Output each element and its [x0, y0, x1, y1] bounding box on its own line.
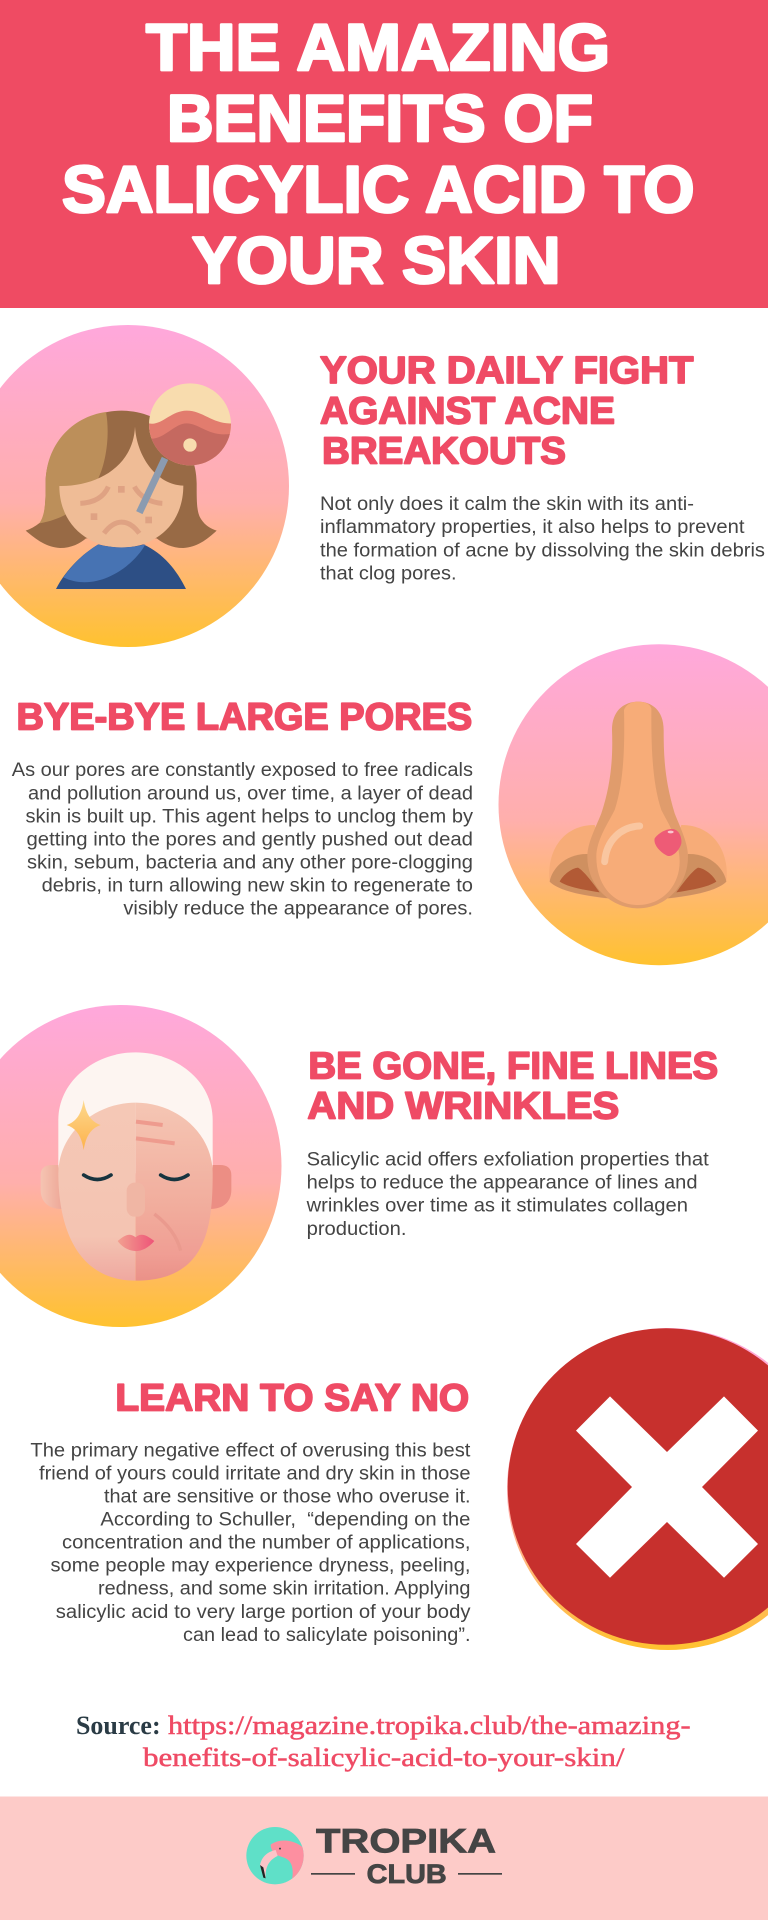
panel: acne breakouts — [0, 325, 765, 647]
text block: acne: inflammatory properties, it also helps to prevent — [320, 517, 745, 538]
text block: side effects — [30, 1440, 471, 1646]
heading: your daily fight: AGAINST ACNE — [320, 390, 615, 432]
text block: wrinkles: production. — [307, 1219, 406, 1240]
panel: large pores — [12, 644, 768, 965]
text block: pores: debris, in turn allowing new skin to regenerate to — [42, 876, 473, 896]
logo wordmark — [311, 1822, 502, 1889]
panel: learn to say no — [30, 1328, 768, 1650]
text block: wrinkles: helps to reduce the appearance of lines and — [307, 1173, 698, 1194]
text block: side effects: salicylic acid to very large portion of your body — [56, 1602, 471, 1623]
icon: nose with pimple — [498, 644, 768, 965]
text block: wrinkles: wrinkles over time as it stimulates collagen — [306, 1196, 688, 1217]
icon: half-aged face — [0, 1005, 282, 1327]
title: YOUR SKIN — [192, 223, 560, 297]
text block: wrinkles — [306, 1150, 709, 1240]
heading: your daily fight: YOUR DAILY FIGHT — [320, 350, 694, 392]
source citation: Source: — [76, 1711, 161, 1740]
source citation: benefits-of-salicylic-acid-to-your-skin/ — [143, 1743, 625, 1772]
header banner — [0, 0, 768, 308]
heading: be gone — [307, 1046, 718, 1128]
text block: pores: skin, sebum, bacteria and any other pore-clogging — [27, 852, 473, 874]
heading: learn to say no: LEARN TO SAY NO — [115, 1378, 469, 1420]
text block: side effects: can lead to salicylate poisoning”. — [183, 1625, 470, 1646]
text block: pores — [12, 760, 474, 920]
text block: acne: Not only does it calm the skin with its anti- — [320, 494, 694, 515]
footer band — [0, 1796, 768, 1920]
text block: pores: and pollution around us, over time, a layer of dead — [28, 783, 473, 804]
logo wordmark: CLUB — [367, 1859, 447, 1889]
text block: pores: getting into the pores and gently pushed out dead — [26, 829, 473, 850]
heading: your daily fight: BREAKOUTS — [322, 430, 566, 472]
heading: bye-bye large pores: BYE-BYE LARGE PORES — [16, 696, 472, 738]
text block: wrinkles: Salicylic acid offers exfoliation properties that — [307, 1150, 709, 1171]
text block: side effects: The primary negative effect of overusing this best — [30, 1440, 471, 1461]
text block: pores: visibly reduce the appearance of pores. — [123, 899, 473, 920]
panel: fine lines and wrinkles — [0, 1005, 718, 1327]
text block: side effects: friend of yours could irritate and dry skin in those — [39, 1463, 470, 1484]
text block: acne: that clog pores. — [320, 564, 456, 584]
heading: be gone: BE GONE, FINE LINES — [308, 1046, 718, 1088]
text block: side effects: According to Schuller, “depending on the — [100, 1510, 470, 1530]
text block: pores: As our pores are constantly exposed to free radicals — [12, 760, 473, 781]
text block: side effects: that are sensitive or those who overuse it. — [104, 1486, 470, 1508]
text block: acne — [320, 494, 765, 584]
icon: red cross circle — [507, 1328, 768, 1650]
icon: flamingo logo — [246, 1827, 305, 1884]
title: SALICYLIC ACID TO — [62, 152, 694, 226]
logo wordmark: TROPIKA — [316, 1822, 496, 1860]
text block: side effects: redness, and some skin irritation. Applying — [98, 1579, 470, 1600]
heading: your daily fight — [320, 350, 694, 472]
title: THE AMAZING — [146, 10, 610, 84]
text block: pores: skin is built up. This agent helps to unclog them by — [26, 806, 474, 827]
text block: acne: the formation of acne by dissolving the skin debris — [320, 540, 765, 561]
face — [59, 427, 183, 547]
source citation — [76, 1711, 691, 1772]
source citation: https://magazine.tropika.club/the-amazing- — [168, 1711, 691, 1740]
heading: be gone: AND WRINKLES — [307, 1086, 619, 1128]
text block: side effects: concentration and the number of applications, — [62, 1533, 470, 1554]
title — [62, 10, 694, 297]
icon: girl with magnifier over acne — [0, 325, 289, 647]
text block: side effects: some people may experience dryness, peeling, — [50, 1556, 470, 1577]
title: BENEFITS OF — [167, 81, 593, 155]
